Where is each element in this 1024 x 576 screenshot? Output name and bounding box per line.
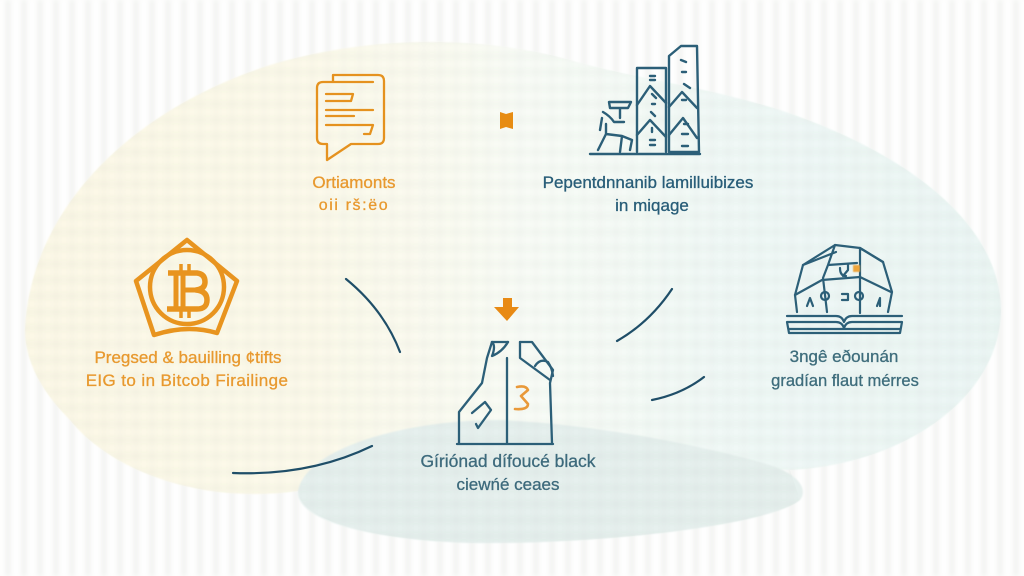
text: document label [312,173,396,214]
arrow: curve right [652,377,704,400]
text: document label: oii rš:ëo [319,197,389,214]
text: globe label: 3ngê eðounán [790,347,898,366]
icon: orange numeral mark [515,386,528,409]
arrow: down orange [494,298,519,321]
icon: tall buildings with figure [590,46,700,154]
text: document label: Ortiamonts [312,173,396,192]
text: bitcoin label: Pregsed & bauilling ¢tifts [94,348,282,367]
text: bitcoin label: EIG to in Bitcob Firailinge [86,371,288,390]
icon: globe dome on open book [787,245,902,333]
arrow: curve top right [617,289,672,341]
text: buildings label: in miqage [615,196,689,215]
arrow: curve top left [346,279,400,352]
panel: lower blue-grey blob [298,420,803,543]
text: globe label: gradían flaut mérres [771,372,919,390]
text: torn document label: ciewńé ceaes [456,475,560,494]
text: torn document label: Gíriónad dífoucé black [420,451,596,471]
text: globe label [771,347,919,390]
icon: small orange marker [500,112,513,129]
icon: torn document [457,342,553,444]
text: buildings label: Pepentdnnanib lamilluibizes [543,173,753,192]
panel: large pale blob fading from yellow to teal [25,42,1001,494]
text: torn document label [420,451,596,494]
icon: small orange globe spot [853,265,860,272]
text: buildings label [543,173,753,215]
icon: document speech bubble [317,75,384,160]
text: bitcoin label [86,348,288,390]
icon: bitcoin star badge [136,240,237,335]
arrow: curve bottom left [233,446,372,473]
